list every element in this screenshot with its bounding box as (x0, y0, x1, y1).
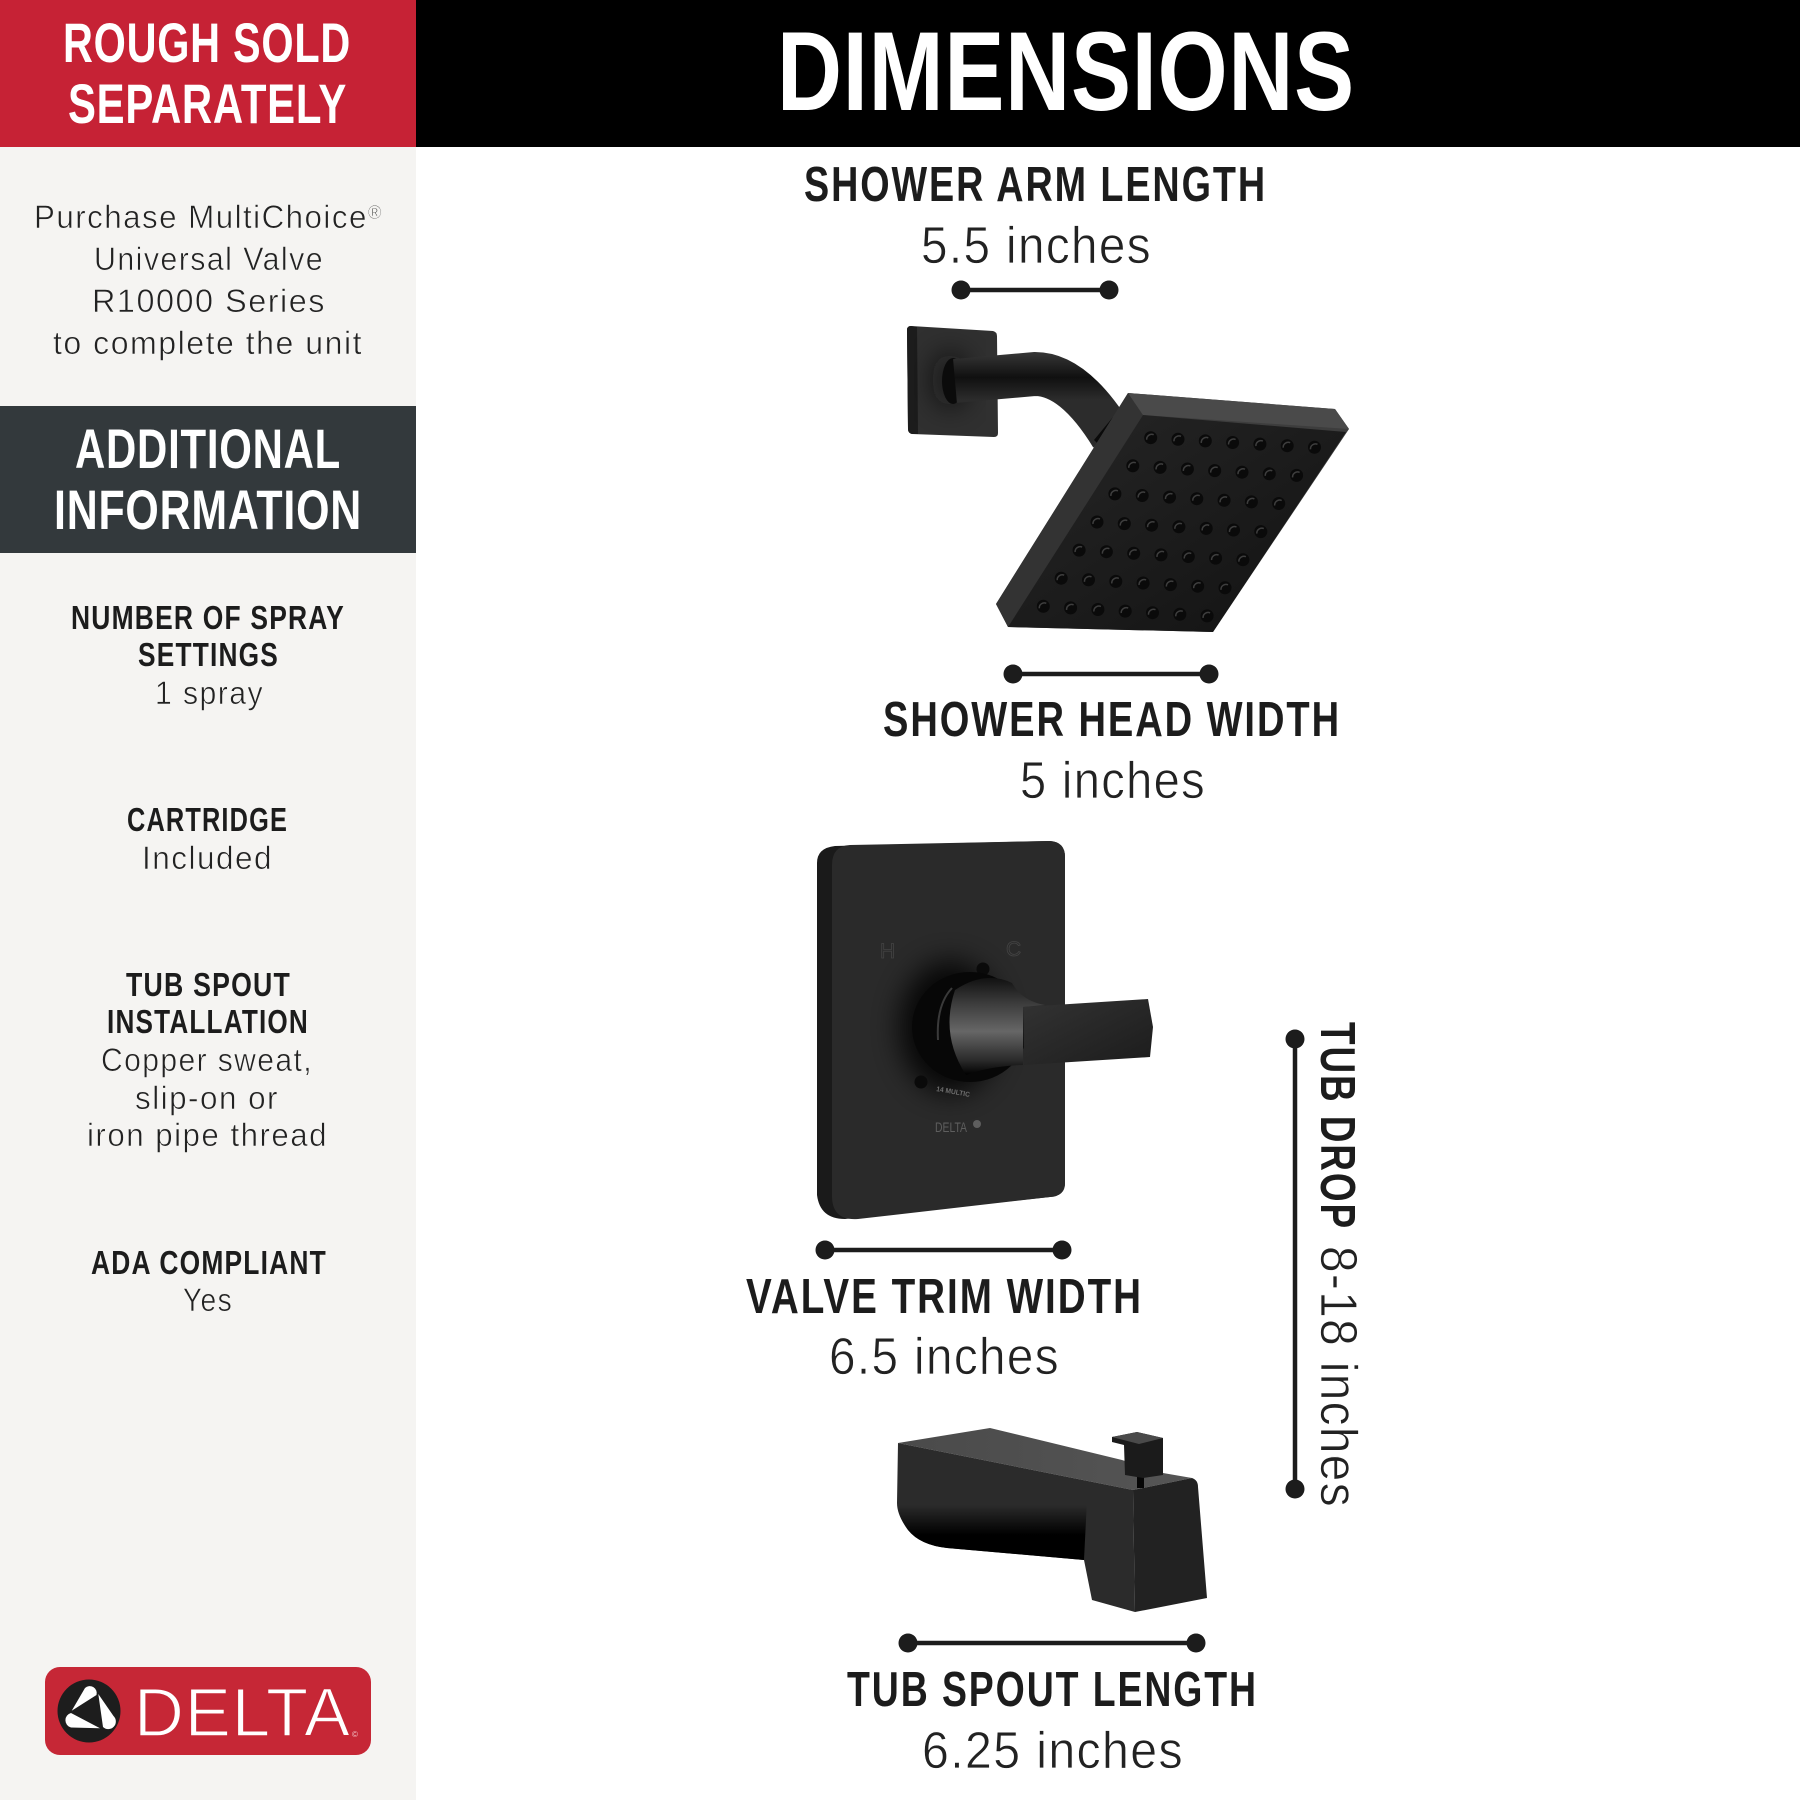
label: valve trim width (746, 1270, 1143, 1386)
label: shower arm length: SHOWER ARM LENGTH (804, 158, 1267, 212)
dimension line: valve trim (816, 1240, 1072, 1260)
spec: cartridge (127, 801, 288, 876)
icon: tub spout (897, 1428, 1207, 1612)
icon: valve trim: H (880, 940, 895, 963)
spec: number of spray settings: SETTINGS (138, 636, 279, 673)
spec: cartridge: Included (142, 840, 273, 876)
dimension line: shower head (1004, 664, 1218, 684)
label: shower head width: 5 inches (1020, 752, 1206, 810)
spec: tub spout installation (87, 966, 328, 1153)
label: tub spout length: TUB SPOUT LENGTH (847, 1663, 1258, 1717)
spec: tub spout installation: TUB SPOUT (126, 966, 291, 1003)
heading: dimensions (416, 0, 1800, 147)
text block: purchase valve note: Universal Valve (94, 241, 324, 277)
heading: additional information: ADDITIONAL (75, 417, 341, 480)
dimension line: tub spout (898, 1634, 1206, 1652)
icon: valve trim: C (1006, 938, 1021, 961)
spec: number of spray settings: 1 spray (155, 675, 264, 711)
spec: tub spout installation: Copper sweat, (101, 1042, 313, 1078)
label: valve trim width: VALVE TRIM WIDTH (746, 1270, 1143, 1324)
label: shower head width (883, 693, 1341, 810)
icon: valve trim: 14 MULTIC (936, 1086, 970, 1099)
spec: tub spout installation: slip-on or (135, 1080, 279, 1116)
label: tub spout length (847, 1663, 1258, 1780)
text block: purchase valve note: ® (368, 203, 383, 224)
icon: valve trim (817, 841, 1153, 1219)
spec: tub spout installation: iron pipe thread (87, 1117, 328, 1153)
label: tub drop (1309, 1022, 1367, 1508)
spec: ada compliant: Yes (183, 1282, 233, 1318)
dimension line: shower arm (952, 280, 1118, 300)
label: valve trim width: 6.5 inches (829, 1328, 1060, 1386)
label: shower arm length (804, 158, 1267, 275)
text block: purchase valve note: to complete the unit (53, 325, 363, 361)
label: shower arm length: 5.5 inches (921, 217, 1152, 275)
heading: dimensions: DIMENSIONS (777, 9, 1355, 134)
icon: valve trim: DELTA (935, 1119, 967, 1135)
spec: ada compliant: ADA COMPLIANT (91, 1244, 327, 1281)
panel: sidebar (0, 0, 416, 1800)
label: tub drop: TUB DROP (1310, 1022, 1364, 1230)
label: tub spout length: 6.25 inches (922, 1722, 1184, 1780)
logo: delta: © (352, 1730, 358, 1739)
spec: ada compliant (91, 1244, 327, 1318)
spec: cartridge: CARTRIDGE (127, 801, 288, 838)
spec: number of spray settings (71, 599, 345, 711)
banner: rough sold separately: ROUGH SOLD (63, 11, 351, 74)
banner: rough sold separately: SEPARATELY (68, 72, 347, 135)
heading: additional information: INFORMATION (54, 478, 362, 541)
logo: delta: DELTA (134, 1674, 350, 1751)
label: tub drop: 8-18 inches (1309, 1246, 1367, 1508)
spec: tub spout installation: INSTALLATION (107, 1003, 309, 1040)
text block: purchase valve note (34, 199, 383, 361)
spec: number of spray settings: NUMBER OF SPRAY (71, 599, 345, 636)
heading: additional information (0, 406, 416, 553)
text block: purchase valve note: R10000 Series (92, 283, 326, 319)
banner: rough sold separately (0, 0, 416, 147)
logo: delta (45, 1667, 371, 1755)
label: shower head width: SHOWER HEAD WIDTH (883, 693, 1341, 747)
dimension line: tub drop (1286, 1030, 1304, 1498)
text block: purchase valve note: Purchase MultiChoice (34, 199, 375, 235)
icon: shower head and arm (907, 326, 1349, 632)
